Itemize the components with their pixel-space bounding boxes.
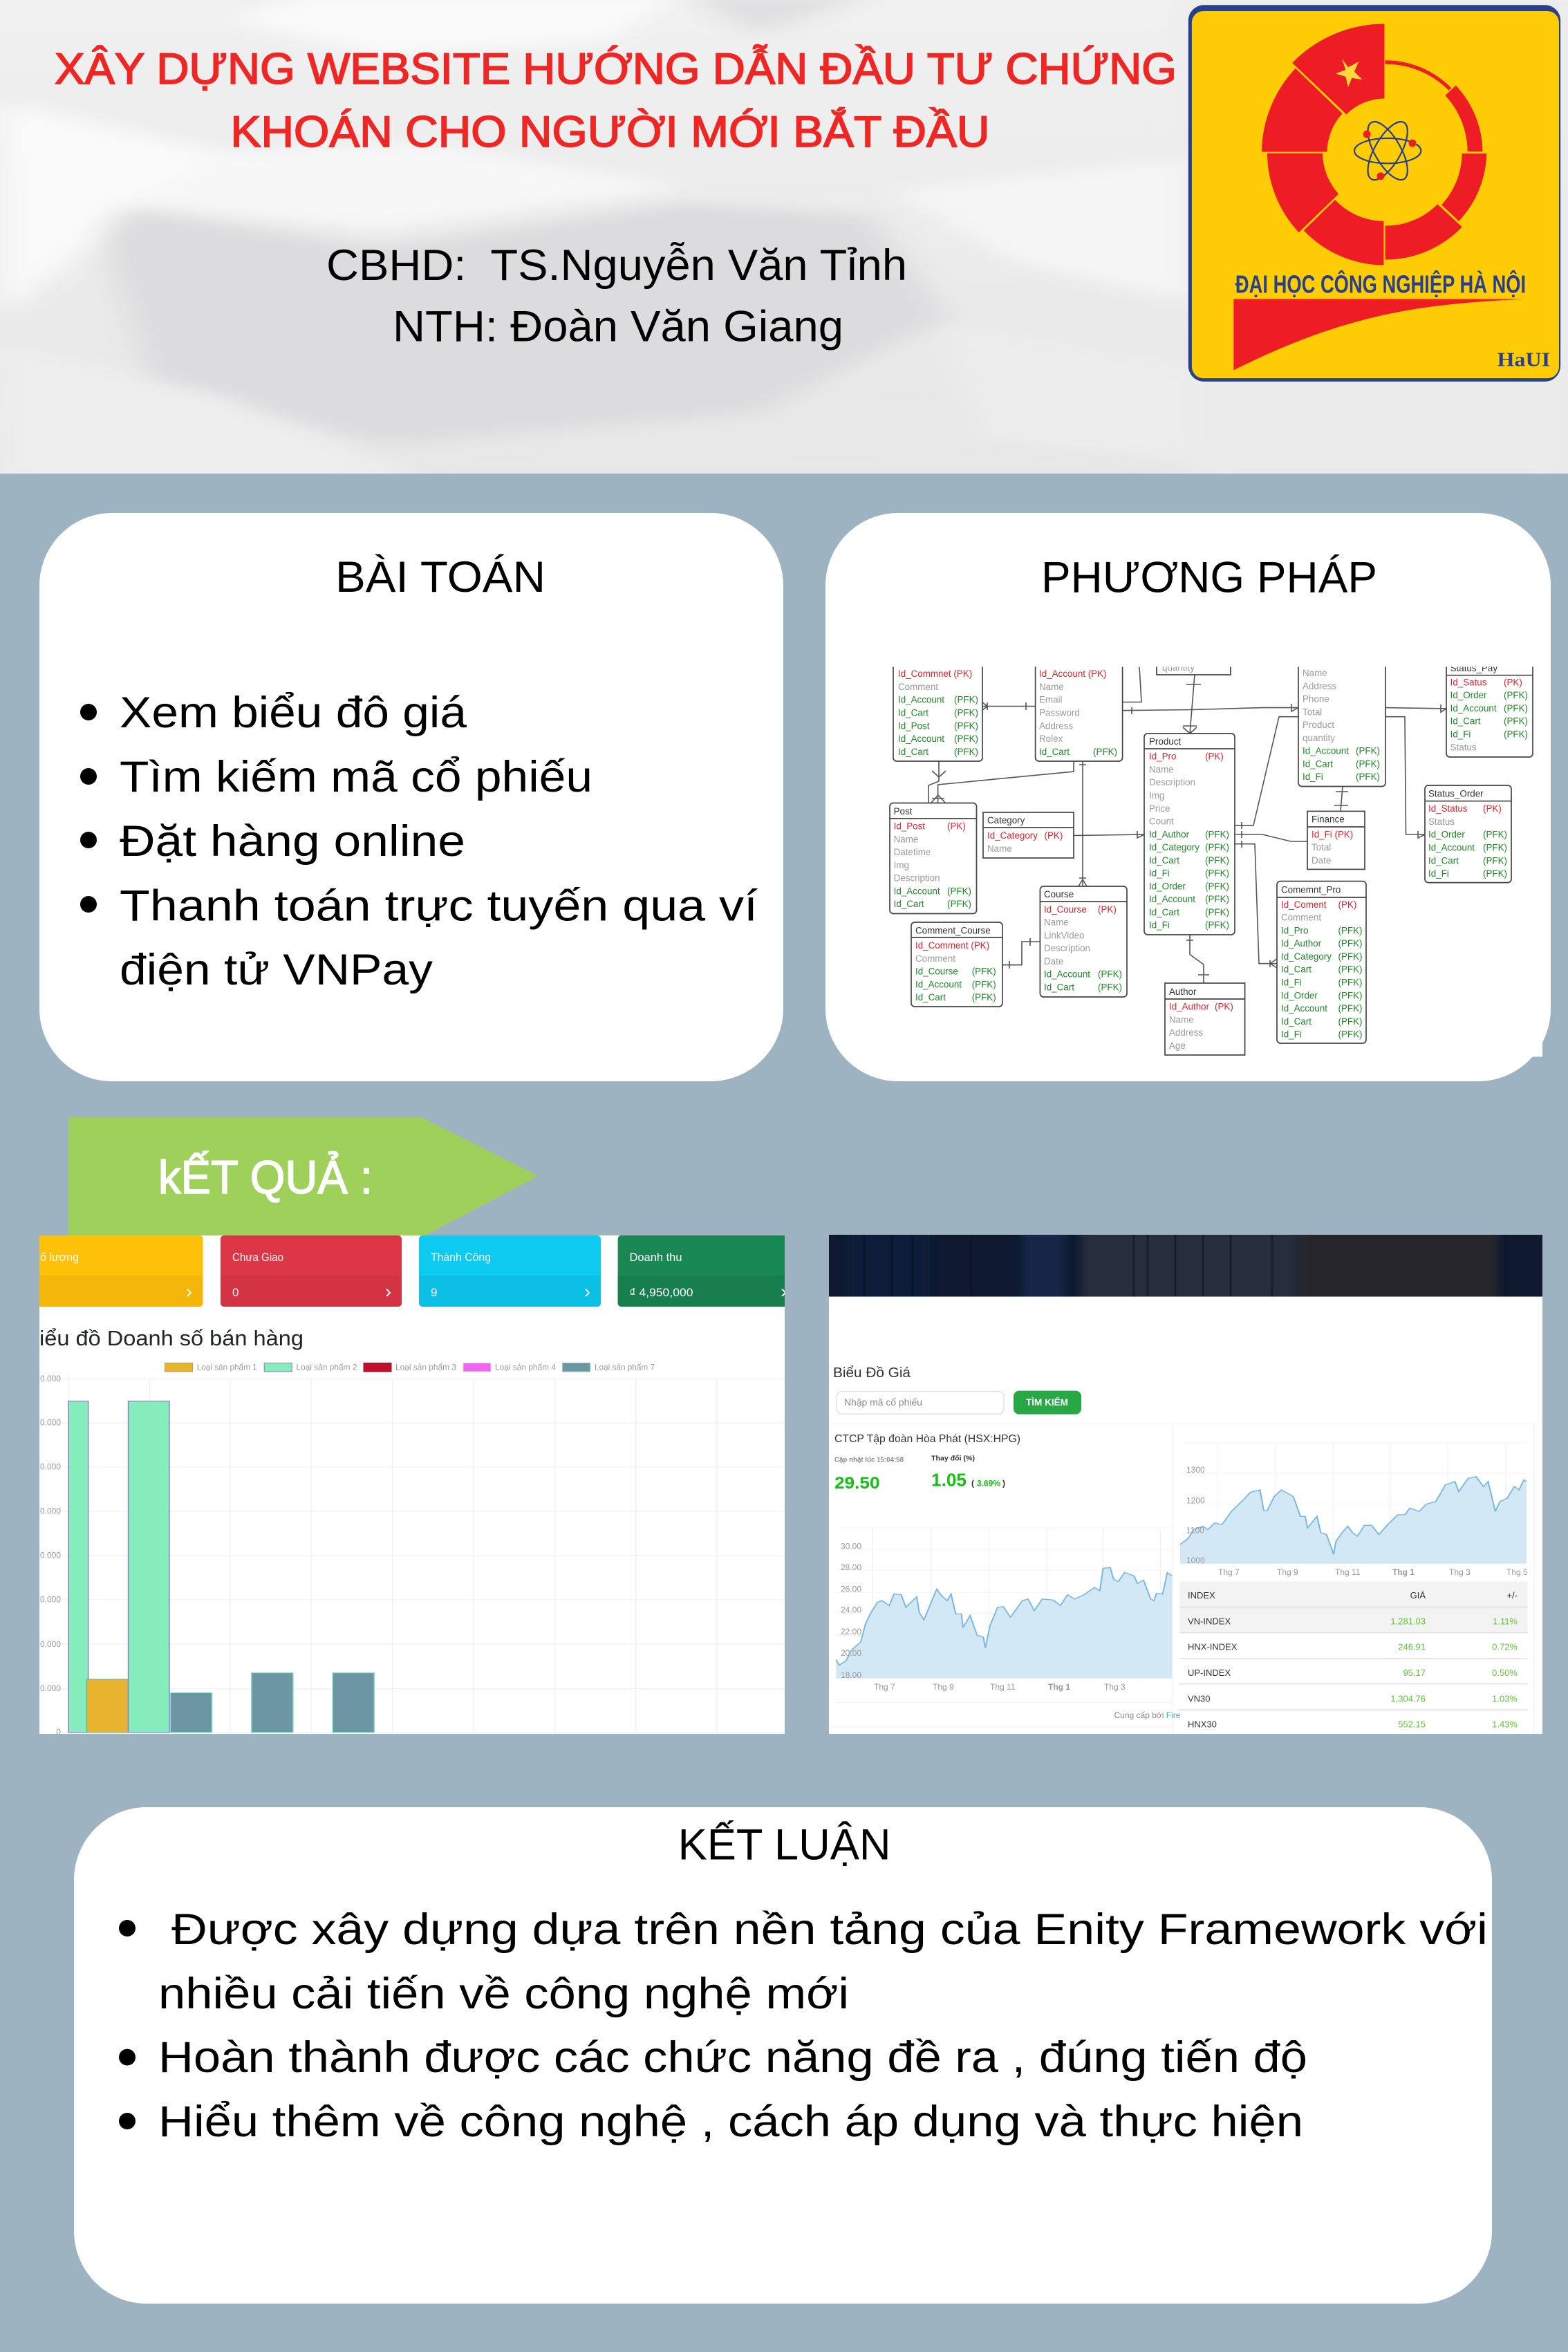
text: company and price: Thay đổi (%) [931,1455,975,1463]
table: Course: Description [1044,943,1090,953]
table: Product: (PFK) [1205,920,1229,931]
title [55,44,1177,156]
table: Comment_Course: (PFK) [972,992,996,1002]
axis labels: Thg 3 [1449,1567,1471,1577]
table: Status_Order: (PFK) [1483,855,1507,866]
table: Course [1040,886,1127,997]
table: Author [1165,983,1245,1055]
table: Category: Category [987,815,1025,825]
table: Account: Password [1039,708,1080,718]
table: market indexes: VN-INDEX [1188,1616,1231,1626]
title: XÂY DỰNG WEBSITE HƯỚNG DẪN ĐẦU TƯ CHỨNG [55,44,1177,93]
icon: university logo: HaUI [1497,350,1550,371]
table: Status_Pay: (PFK) [1504,690,1528,700]
list: conclusion bullets: Được xây dựng dựa trên nền tảng của Enity Framework với [171,1905,1488,1954]
table: Course: Course [1044,889,1074,899]
table: Comemnt_Pro: (PFK) [1338,1016,1362,1027]
table: Product: (PFK) [1205,868,1229,879]
table: Status_Order: Id_Status [1428,803,1468,814]
stat card: doanh thu: Doanh thu [629,1251,682,1264]
table: Status_Pay: Id_Account [1450,703,1497,713]
table: Product: (PFK) [1205,829,1229,839]
table: Category [983,812,1074,858]
stat card: số lượng: › [186,1281,192,1302]
table: Post: Img [894,860,909,870]
axis labels: 1000 [1186,1556,1205,1565]
table: market indexes: 552.15 [1398,1719,1426,1730]
table: Author: Author [1169,987,1197,997]
bar chart: sales by product type: 0.000 [40,1595,61,1605]
table: Product: Id_Author [1149,829,1190,839]
stat card: chưa giao: 0 [232,1286,239,1299]
table: market indexes: 246.91 [1398,1641,1426,1652]
table: Order: (PFK) [1356,758,1380,769]
table: Post: Id_Post [894,821,925,831]
table: Comment: (PFK) [954,708,978,718]
table: Comment_Course: Comment_Course [915,925,991,936]
table: Product: (PFK) [1205,842,1229,852]
table: Comment: (PFK) [954,720,978,731]
table: Course: (PFK) [1098,969,1122,980]
text: company and price: 1.05 [931,1470,967,1491]
table: Course: Id_Cart [1044,982,1074,993]
text: company and price: 3.69% [977,1478,1000,1488]
list: conclusion bullets: Hoàn thành được các chức năng đề ra , đúng tiến độ [158,2033,1307,2082]
table: Author: Age [1169,1040,1186,1051]
table: Status_Pay: Status [1450,742,1477,752]
stat card: thành công: › [584,1281,590,1302]
table: Comment_Course: (PFK) [972,979,996,989]
table: Finance: Date [1312,855,1331,866]
search button [1014,1391,1081,1415]
legend: Loại sản phẩm 2 [296,1362,357,1372]
table: Course: Id_Account [1044,969,1090,980]
table: market indexes: 1.11% [1493,1616,1518,1626]
table: Post: (PFK) [947,899,971,909]
icon: university logo [1188,5,1561,382]
table: Order: Total [1303,707,1322,717]
screenshot: sales dashboard [39,1235,787,1737]
heading: sales chart: iểu đồ Doanh số bán hàng [39,1326,304,1350]
table: Product: Id_Pro [1149,752,1176,762]
stat card: thành công: Thành Công [431,1251,491,1264]
table: Comemnt_Pro: (PFK) [1338,1003,1362,1014]
table: Post: Datetime [894,847,931,857]
table: Author: Name [1169,1014,1194,1025]
table: Course: Id_Course [1044,904,1087,915]
axis labels: Thg 7 [1218,1567,1240,1577]
arrow: kết quả banner [68,1117,539,1238]
table: Status_Order: Status_Order [1428,788,1484,799]
table: Status_Pay: Status_Pay [1450,663,1497,673]
table: Comemnt_Pro: Id_Fi [1281,978,1302,987]
table: Comemnt_Pro: (PFK) [1338,925,1362,935]
table: Finance: Finance [1312,814,1345,825]
table: Order: Id_Fi [1303,772,1323,782]
table: Comemnt_Pro: Id_Pro [1281,925,1308,935]
table: Product: Id_Cart [1149,907,1179,917]
axis labels: 26.00 [841,1585,861,1594]
table: Course: LinkVideo [1044,930,1085,940]
table: Product: (PFK) [1205,855,1229,866]
table: Comment_Course: Id_Course [915,967,958,977]
table: Product: Img [1149,790,1164,801]
axis labels: 20.00 [841,1648,861,1658]
table: Comemnt_Pro: Comment [1281,913,1321,923]
table: Status_Order: Id_Cart [1428,855,1459,866]
table: Comment_Course: (PFK) [972,967,996,977]
chart: ER database diagram [889,666,1542,1056]
stat card: thành công: 9 [431,1286,437,1299]
bar chart: sales by product type: 0.000 [40,1683,61,1693]
table: Category: Id_Category [987,830,1038,841]
axis labels: 30.00 [841,1542,861,1551]
table: Comemnt_Pro: Id_Fi [1281,1029,1302,1040]
table: Comment: Id_Account [898,695,944,705]
table: Category: Name [987,843,1012,854]
axis labels: Thg 3 [1104,1682,1126,1692]
table: Status_Order: (PFK) [1483,842,1507,853]
table: Author: Id_Author [1169,1002,1210,1012]
table: Comemnt_Pro: (PFK) [1338,951,1362,962]
list: conclusion bullets: Hiểu thêm về công nghệ , cách áp dụng và thực hiện [158,2098,1303,2146]
table: Product: (PFK) [1205,907,1229,917]
table: Status_Pay: (PFK) [1504,703,1528,713]
table: Product: Name [1149,765,1174,774]
table: Status_Order: (PFK) [1483,830,1507,840]
table: Product: (PK) [1205,752,1224,762]
title: KHOÁN CHO NGƯỜI MỚI BẮT ĐẦU [231,107,990,156]
table: market indexes: HNX-INDEX [1188,1641,1238,1652]
text: company and price: Cập nhật lúc 15:04:58 [834,1456,904,1464]
axis labels: Thg 9 [1277,1567,1298,1577]
table: Product: Id_Category [1149,842,1200,852]
table: Finance: Total [1312,842,1331,852]
stat card: doanh thu: › [781,1281,787,1302]
legend: Loại sản phẩm 1 [197,1362,257,1372]
axis labels: Thg 9 [933,1682,954,1692]
table: market indexes: 1.43% [1492,1719,1518,1730]
stat card: chưa giao [221,1235,402,1307]
table: market indexes: GIÁ [1410,1590,1426,1600]
axis labels: Cung cấp bởi Fire [1114,1710,1181,1720]
bar chart: sales by product type: 0.000 [40,1462,61,1472]
table: Order: Address [1303,681,1336,691]
axis labels: 18.00 [841,1670,861,1680]
text: company and price [834,1433,1020,1493]
table: Comment: Id_Account [898,734,944,744]
arrow: kết quả banner: kẾT QUẢ : [158,1150,373,1204]
supervisor and author: CBHD: TS.Nguyễn Văn Tỉnh [326,241,907,290]
table: Comment: Id_Cart [898,747,928,757]
list: problem bullets: Tìm kiếm mã cổ phiếu [120,753,592,801]
table: Finance [1307,811,1365,869]
table: Status_Pay: Id_Order [1450,690,1487,700]
list: conclusion bullets: nhiều cải tiến về công nghệ mới [158,1970,849,2018]
table: Product: Id_Cart [1149,855,1179,866]
table: Comment: Id_Post [898,720,930,731]
stat card: doanh thu: ₫ 4,950,000 [629,1286,693,1299]
axis labels: Thg 11 [1335,1567,1361,1577]
list: conclusion bullets [119,1905,1488,2146]
table: Category: (PK) [1044,830,1063,841]
table: Product: Id_Fi [1149,920,1170,931]
table: Account: Address [1039,720,1073,731]
list: problem bullets [80,689,758,994]
table: Comment: Comment [898,682,938,692]
axis labels: Thg 5 [1506,1567,1528,1577]
table: Product: Price [1149,803,1170,814]
table: Status_Order: Status [1428,816,1455,827]
table: Course: (PK) [1098,904,1117,915]
table: market indexes: 1,304.76 [1390,1694,1426,1704]
table: market indexes: +/- [1506,1590,1518,1600]
table: Account [1036,657,1123,761]
table: top fragment: quantity [1162,662,1195,673]
search button: TÌM KIẾM [1026,1397,1068,1408]
table: Status_Order: (PK) [1483,803,1502,814]
table: Status_Order: Id_Account [1428,842,1475,853]
table: Status_Pay: (PK) [1504,677,1522,687]
table: Product: (PFK) [1205,894,1229,904]
search input: Nhập mã cổ phiếu [844,1397,922,1408]
table: Comemnt_Pro: (PFK) [1338,978,1362,987]
charts: area charts and panel lines [829,1424,1535,1734]
axis labels [841,1465,1528,1720]
axis labels: Thg 1 [1048,1682,1070,1692]
table: Account: Name [1039,682,1064,692]
axis labels: 22.00 [841,1627,861,1636]
table: Product: (PFK) [1205,881,1229,891]
panel: kết luận [74,1807,1492,2304]
table: Comment: Id_Commnet (PK) [898,669,972,679]
table: market indexes: VN30 [1188,1694,1211,1704]
table: Comment_Course [911,922,1002,1007]
table: Comment: (PFK) [954,747,978,757]
legend: Loại sản phẩm 3 [395,1362,456,1372]
text: company and price: ( [971,1478,974,1488]
stat card: thành công [419,1235,601,1307]
bar chart: sales by product type: 0.000 [40,1374,61,1383]
table: Comemnt_Pro: (PFK) [1338,964,1362,975]
table: Product: Id_Fi [1149,868,1170,879]
image band: dark header [829,1235,1542,1297]
table: Order [1298,657,1385,787]
table: Product [1144,734,1235,935]
table: Post: Id_Cart [894,899,924,909]
table: Account: Rolex [1039,734,1063,744]
axis labels: 1200 [1186,1496,1205,1506]
legend: Loại sản phẩm 4 [495,1362,556,1372]
bar chart: sales by product type [40,1374,795,1737]
stat card: số lượng: ố lượng [40,1251,79,1264]
table: Comemnt_Pro: Id_Cart [1281,1016,1312,1027]
list: problem bullets: điện tử VNPay [120,946,433,994]
table: Comemnt_Pro: (PFK) [1338,990,1362,1000]
table: Status_Pay [1446,657,1533,757]
table: market indexes: 1,281.03 [1390,1616,1426,1626]
table: Course: Date [1044,956,1063,967]
table: market indexes: UP-INDEX [1188,1668,1231,1678]
text: company and price: 29.50 [834,1474,879,1493]
table: Finance: Id_Fi (PK) [1312,829,1353,839]
table: Order: quantity [1303,733,1335,743]
table: Status_Order [1425,785,1511,883]
table: market indexes: HNX30 [1188,1719,1217,1730]
table: Account: Id_Cart [1039,747,1070,757]
axis labels: Thg 1 [1392,1567,1415,1577]
table: Post [890,803,976,914]
table: Course: Name [1044,917,1069,928]
text: company and price: CTCP Tập đoàn Hòa Phát (HSX:HPG) [834,1433,1020,1445]
panel: phương pháp [825,513,1551,1081]
table: Comemnt_Pro: Comemnt_Pro [1281,884,1341,895]
table: Comment_Course: Id_Comment (PK) [915,940,989,951]
table: Order: (PFK) [1356,746,1380,756]
table: Product: Id_Account [1149,894,1195,904]
stat card: số lượng [28,1235,203,1307]
search input [837,1392,1004,1414]
bar chart: sales by product type: 0.000 [40,1551,61,1560]
stat card: doanh thu [618,1235,799,1307]
table: Status_Pay: (PFK) [1504,716,1528,727]
supervisor and author: NTH: Đoàn Văn Giang [393,303,843,351]
table: Comemnt_Pro: (PFK) [1338,938,1362,949]
table: Comemnt_Pro: (PK) [1338,899,1356,910]
bar chart: sales by product type: 0.000 [40,1506,61,1516]
table: Status_Pay: Id_Satus [1450,677,1487,687]
table: Comment: (PFK) [954,734,978,744]
table: Author: (PK) [1215,1002,1233,1012]
bar chart: sales by product type: 0.000 [40,1639,61,1649]
table: Comemnt_Pro: Id_Category [1281,951,1332,962]
table: Status_Order: (PFK) [1483,868,1507,879]
table: Comment_Course: Id_Account [915,979,962,989]
heading: kết luận: KẾT LUẬN [678,1820,891,1869]
table: Comemnt_Pro: Id_Author [1281,938,1322,949]
table: Order: Name [1303,668,1327,678]
table: Order: Id_Account [1303,746,1349,756]
legend: Loại sản phẩm 7 [595,1362,655,1372]
table: Post: Id_Account [894,886,940,896]
legend [165,1362,655,1372]
table: Account: Email [1039,695,1063,705]
heading: bài toán: BÀI TOÁN [335,553,545,601]
table: market indexes: 95.17 [1403,1668,1426,1678]
axis labels: Thg 11 [990,1682,1016,1692]
list: problem bullets: Đặt hàng online [120,817,465,866]
table: Post: (PFK) [947,886,971,896]
heading: biểu đồ giá: Biểu Đồ Giá [833,1365,911,1381]
table: Author: Address [1169,1027,1203,1038]
table: Post: Name [894,834,918,844]
table: Comment: (PFK) [954,695,978,705]
table: Comemnt_Pro: Id_Coment [1281,899,1327,910]
table: Comment [893,657,982,761]
screenshot: stock price page [829,1235,1542,1734]
table: Comment_Course: Comment [915,953,955,964]
table: Comemnt_Pro: Id_Cart [1281,964,1312,975]
table: Comemnt_Pro: (PFK) [1338,1029,1362,1040]
table: Product: Description [1149,777,1195,787]
table: top fragment [1156,666,1231,675]
axis labels: 24.00 [841,1605,861,1615]
table: Course: (PFK) [1098,982,1122,993]
table: Post: (PK) [947,821,966,831]
axis labels: 1300 [1186,1465,1205,1475]
table: Status_Pay: Id_Cart [1450,716,1481,727]
table: Comemnt_Pro: Id_Account [1281,1003,1327,1014]
table: Comment: Id_Cart [898,708,928,718]
list: problem bullets: Xem biểu đô giá [120,689,467,737]
table: Order: Id_Cart [1303,758,1333,769]
table: Status_Order: Id_Fi [1428,868,1449,879]
panel: bài toán [39,513,783,1081]
table: Status_Order: Id_Order [1428,830,1465,840]
table: Post: Post [894,806,913,816]
axis labels: Thg 7 [874,1682,895,1692]
bar chart: sales by product type: 0 [56,1727,61,1737]
table: Product: Product [1149,736,1181,747]
table: Order: (PFK) [1356,772,1380,782]
table: market indexes: 0.72% [1492,1641,1518,1652]
table: Post: Description [894,873,940,884]
header background: crumpled paper [0,0,1568,474]
axis labels: 1100 [1186,1525,1204,1535]
table: market indexes [1188,1590,1518,1730]
table: Comemnt_Pro: Id_Order [1281,990,1318,1000]
supervisor and author [326,241,907,351]
table: Comment_Course: Id_Cart [915,992,946,1002]
table: market indexes: INDEX [1188,1590,1215,1600]
heading: phương pháp: PHƯƠNG PHÁP [1041,553,1377,601]
table: market indexes: 0.50% [1492,1668,1518,1678]
table: Order: Product [1303,720,1334,730]
table: Status_Pay: Id_Fi [1450,729,1471,740]
table: Account: (PFK) [1093,747,1117,757]
table: Order: Phone [1303,694,1329,704]
table: Comemnt_Pro [1277,881,1366,1043]
bar chart: sales by product type: 0.000 [40,1418,61,1428]
table: Status_Pay: (PFK) [1504,729,1528,740]
table: Product: Count [1149,816,1174,827]
table: Account: Id_Account (PK) [1039,669,1107,679]
table: market indexes: 1.03% [1492,1694,1518,1704]
stat card: chưa giao: Chưa Giao [232,1251,283,1264]
text: company and price: ) [1002,1478,1005,1488]
table: Product: Id_Order [1149,881,1186,891]
list: problem bullets: Thanh toán trực tuyến qua ví [120,882,758,931]
axis labels: 28.00 [841,1562,861,1572]
stat card: chưa giao: › [385,1281,391,1302]
